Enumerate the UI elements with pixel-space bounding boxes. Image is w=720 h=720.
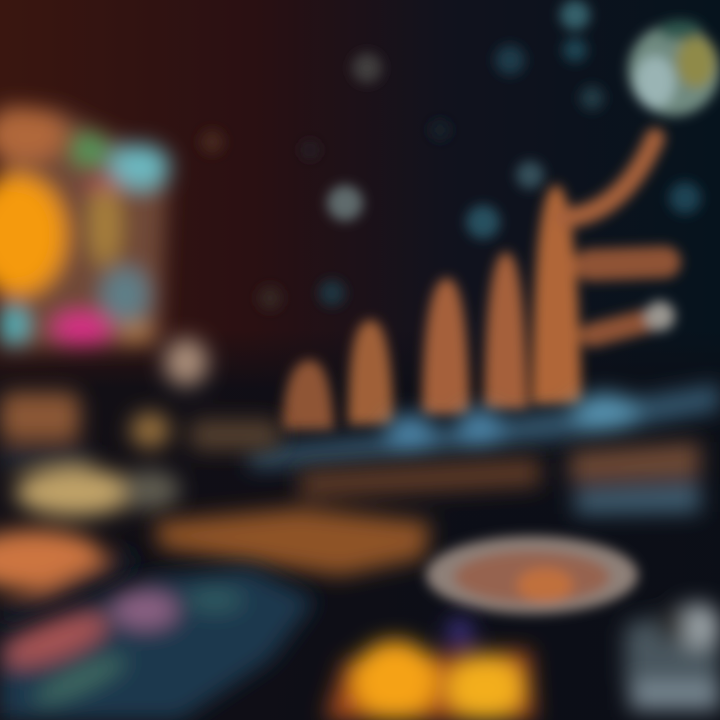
brown strip tray <box>155 442 700 576</box>
arrow <box>565 138 655 218</box>
bar chart with rising arrow <box>282 138 675 430</box>
dark lower background <box>0 330 720 720</box>
icon: orange sun circle <box>0 175 66 295</box>
plate <box>426 536 638 614</box>
side branches <box>590 262 665 265</box>
shelf objects at left <box>0 338 280 628</box>
device lower right <box>625 603 720 710</box>
stars <box>200 0 701 310</box>
yellow glowing objects <box>325 619 535 720</box>
planet globe <box>628 20 720 116</box>
bars <box>282 360 334 430</box>
panel: colorful board at left <box>0 105 170 350</box>
blue horizontal band <box>250 384 720 468</box>
panel: blue mat bottom left <box>0 568 315 720</box>
